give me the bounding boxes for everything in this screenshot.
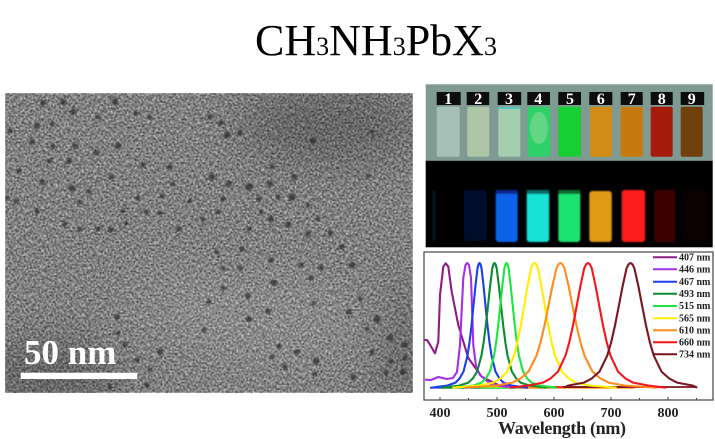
- vial 5: [558, 91, 581, 157]
- title: CH3NH3PbX3: [255, 16, 497, 65]
- TEM nanoparticles: [5, 99, 408, 390]
- x axis tick labels: 600: [544, 406, 564, 421]
- x axis title: Wavelength (nm): [498, 418, 626, 439]
- vial 2: [467, 91, 489, 157]
- legend: 493 nm: [679, 289, 711, 300]
- legend: 660 nm: [679, 338, 711, 348]
- legend: [653, 252, 711, 360]
- TEM brightness variation: [5, 93, 413, 393]
- scale bar label: 50 nm: [24, 333, 116, 372]
- curve: 467 nm: [432, 263, 528, 388]
- vial 3: 3: [505, 91, 513, 108]
- spectral curves: [424, 263, 697, 388]
- vial 2: 2: [474, 91, 482, 108]
- curve: 493 nm: [442, 263, 547, 388]
- vial 3: [498, 91, 521, 157]
- curve: 610 nm: [464, 263, 656, 388]
- legend: 407 nm: [679, 252, 711, 264]
- x axis tick labels: 500: [486, 406, 508, 421]
- legend: 734 nm: [679, 350, 711, 360]
- x axis tick labels: 400: [430, 406, 450, 421]
- plot frame: [424, 252, 713, 400]
- x axis tick labels: 800: [658, 406, 678, 421]
- vial 1: 1: [444, 91, 452, 108]
- x axis tick labels: 700: [600, 406, 622, 421]
- chart: photoluminescence spectra: [424, 252, 713, 439]
- curve: 515 nm: [457, 263, 556, 388]
- vial 8: 8: [658, 91, 666, 108]
- legend: 467 nm: [679, 277, 711, 288]
- TEM grainy background: [5, 93, 413, 393]
- glowing vials: [433, 190, 707, 242]
- legend: 565 nm: [679, 314, 711, 324]
- vial 8: [651, 91, 673, 157]
- curve: 565 nm: [452, 263, 617, 388]
- vial 6: [589, 91, 612, 157]
- panel: TEM micrograph: [5, 93, 413, 393]
- legend: 610 nm: [679, 326, 711, 336]
- panel: vials under daylight: [426, 84, 713, 161]
- vial 9: [681, 91, 704, 157]
- x axis ticks: [440, 397, 696, 400]
- legend: 515 nm: [679, 301, 711, 312]
- vial 5: 5: [566, 91, 574, 108]
- curve: 407 nm: [424, 263, 528, 388]
- x axis tick labels: [430, 406, 678, 421]
- curve: 734 nm: [564, 263, 697, 388]
- baselines: [430, 386, 697, 388]
- panel: vials under UV light: [426, 161, 713, 247]
- vial 4: [527, 91, 550, 157]
- vial 4: 4: [534, 91, 542, 108]
- curve: 660 nm: [510, 263, 666, 388]
- scale bar: [21, 373, 137, 379]
- vial 9: 9: [688, 91, 696, 108]
- vial 7: [621, 91, 643, 157]
- vial 6: 6: [597, 91, 605, 108]
- legend: 446 nm: [679, 264, 711, 276]
- curve: 446 nm: [425, 263, 515, 388]
- vial 7: 7: [628, 91, 636, 108]
- vial 1: [437, 91, 461, 157]
